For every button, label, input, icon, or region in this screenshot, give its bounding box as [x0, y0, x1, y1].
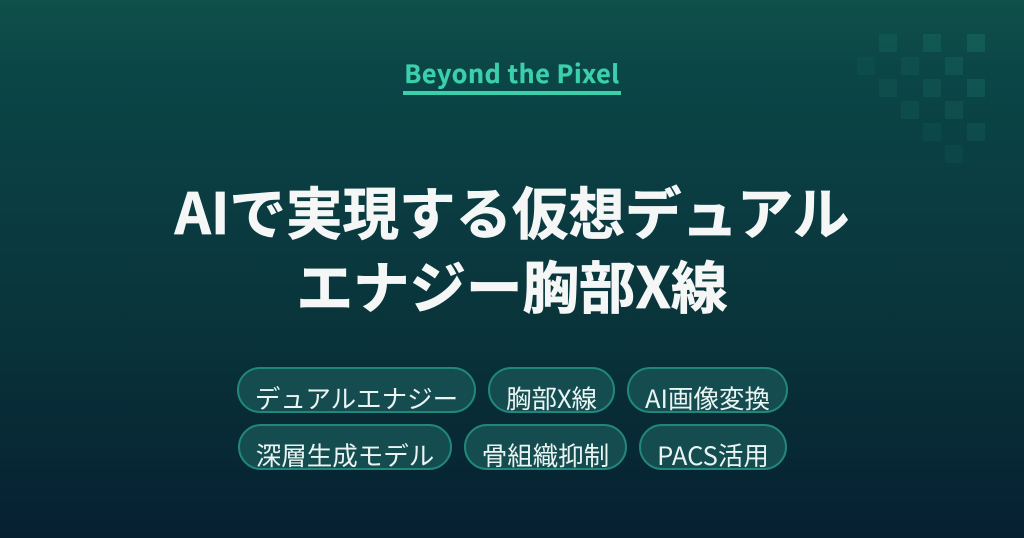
tag: PACS活用: [639, 424, 787, 473]
tag: デュアルエナジー: デュアルエナジー: [255, 379, 458, 416]
eyebrow underline: [403, 91, 621, 95]
tag: 骨組織抑制: [464, 424, 627, 473]
tag: AI画像変換: AI画像変換: [645, 379, 770, 416]
title: エナジー胸部X線: [297, 243, 727, 325]
tag: AI画像変換: [627, 367, 788, 416]
tag: PACS活用: PACS活用: [657, 436, 769, 473]
tag: 深層生成モデル: [238, 424, 452, 473]
tag: 胸部X線: 胸部X線: [506, 379, 597, 416]
tag: 胸部X線: [488, 367, 615, 416]
title: AIで実現する仮想デュアル: [175, 169, 849, 251]
tag: 深層生成モデル: 深層生成モデル: [256, 436, 434, 473]
decorative pixel grid icon: [879, 34, 985, 141]
eyebrow label: Beyond the Pixel: Beyond the Pixel: [404, 55, 620, 91]
tag: デュアルエナジー: [237, 367, 476, 416]
title: [174, 169, 849, 325]
tag: 骨組織抑制: 骨組織抑制: [482, 436, 609, 473]
